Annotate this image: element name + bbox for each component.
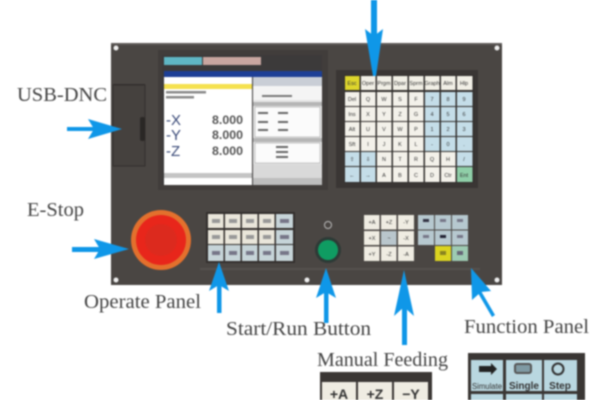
inset: function panel keys close-up	[468, 353, 585, 400]
main keypad: Z	[398, 112, 402, 118]
operate panel keys	[206, 212, 295, 263]
inset: manual feeding keys close-up	[320, 372, 432, 400]
manual feeding keys	[364, 215, 414, 261]
main keypad: Dpar	[394, 81, 406, 87]
main keypad: L	[414, 142, 418, 148]
main keypad: Ctr	[444, 173, 452, 179]
main keypad: B	[398, 173, 402, 179]
main keypad: J	[383, 142, 386, 148]
main keypad: 4	[430, 112, 434, 118]
main keypad: W	[397, 127, 403, 133]
label: Manual Feeding: Manual Feeding	[317, 349, 448, 371]
manual feeding keys: -Y	[403, 220, 409, 226]
LCD screen	[158, 50, 328, 190]
arrow: Start/Run Button	[316, 268, 336, 323]
inset: function panel keys close-up: Single	[509, 381, 539, 392]
manual feeding keys: +Y	[369, 252, 376, 258]
main keypad: 2	[446, 127, 450, 133]
label: USB-DNC: USB-DNC	[17, 84, 107, 106]
main keypad: 3	[462, 127, 466, 133]
manual feeding keys: +Z	[386, 220, 393, 226]
main keypad: Del	[348, 97, 356, 103]
main keypad: ←	[349, 173, 355, 179]
main keypad: -	[431, 142, 433, 148]
label: Function Panel: Function Panel	[464, 316, 589, 338]
arrow: USB-DNC	[67, 119, 122, 139]
main keypad: ⇧	[350, 156, 354, 163]
main keypad: G	[414, 112, 418, 118]
main keypad: Sprm	[409, 81, 423, 87]
arrow: Operate Panel	[209, 262, 229, 313]
main keypad: Y	[382, 112, 386, 118]
main keypad: W	[381, 97, 387, 103]
main keypad	[336, 70, 478, 188]
main keypad: V	[382, 127, 386, 133]
inset: function panel keys close-up: Simulate	[472, 382, 503, 391]
LCD screen: 8.000	[212, 128, 243, 142]
manual feeding keys: -Z	[386, 252, 392, 258]
manual feeding keys: -A	[403, 252, 409, 258]
arrow: E-Stop	[72, 239, 129, 259]
main keypad: /	[463, 157, 465, 163]
main keypad: S	[398, 97, 402, 103]
main keypad: Q	[430, 157, 435, 163]
main keypad: Oper	[362, 81, 374, 87]
main keypad: D	[430, 173, 434, 179]
manual feeding keys: +X	[369, 236, 376, 242]
main keypad: Prgm	[377, 81, 391, 87]
main keypad: C	[414, 173, 418, 179]
main keypad: Q	[366, 97, 371, 103]
function panel keys	[418, 215, 468, 261]
main keypad: I	[367, 142, 369, 148]
main keypad: T	[398, 157, 402, 163]
LCD screen: -Y	[166, 127, 181, 144]
main keypad: 1	[430, 127, 434, 133]
main keypad: U	[366, 127, 370, 133]
arrow: Manual Feeding	[394, 270, 414, 345]
LCD screen: -X	[166, 112, 181, 129]
manual feeding keys: ~	[387, 236, 391, 242]
main keypad: H	[446, 157, 450, 163]
main keypad: F	[414, 97, 418, 103]
manual feeding keys: +A	[369, 220, 376, 226]
main keypad: 0	[446, 142, 450, 148]
main keypad: →	[365, 173, 371, 179]
label: E-Stop: E-Stop	[27, 199, 84, 221]
main keypad: Ins	[348, 112, 356, 118]
label: Operate Panel: Operate Panel	[84, 291, 201, 313]
LCD screen: 8.000	[212, 144, 243, 158]
LCD screen: -Z	[166, 143, 180, 160]
main keypad: Sft	[349, 142, 356, 148]
main keypad: Hlp	[460, 81, 468, 87]
main keypad: ⇩	[366, 156, 370, 163]
LCD screen: 8.000	[212, 113, 243, 127]
main keypad: Esc	[347, 81, 357, 87]
USB-DNC port cover	[113, 85, 145, 166]
label: Start/Run Button: Start/Run Button	[226, 318, 371, 340]
inset: function panel keys close-up: Step	[549, 381, 571, 392]
main keypad: 8	[446, 97, 450, 103]
main keypad: X	[366, 112, 370, 118]
main keypad: 6	[462, 112, 466, 118]
start/run button	[315, 222, 341, 263]
main keypad: Alm	[443, 81, 453, 87]
main keypad: R	[414, 157, 418, 163]
arrow: Function Panel	[471, 268, 495, 317]
main keypad: .	[463, 142, 465, 148]
main keypad: Alt	[349, 127, 356, 133]
main keypad: Ent	[460, 173, 469, 179]
main keypad: A	[382, 173, 386, 179]
arrow: to main keypad	[365, 0, 383, 76]
main keypad: Graph	[424, 81, 440, 87]
manual feeding keys: -X	[403, 236, 409, 242]
main keypad: K	[398, 142, 402, 148]
main keypad: 7	[430, 97, 434, 103]
main keypad: 9	[462, 97, 466, 103]
main keypad: N	[382, 157, 386, 163]
main keypad: 5	[446, 112, 450, 118]
panel: CNC controller body	[111, 43, 502, 285]
main keypad: P	[414, 127, 418, 133]
E-Stop button	[131, 210, 191, 270]
